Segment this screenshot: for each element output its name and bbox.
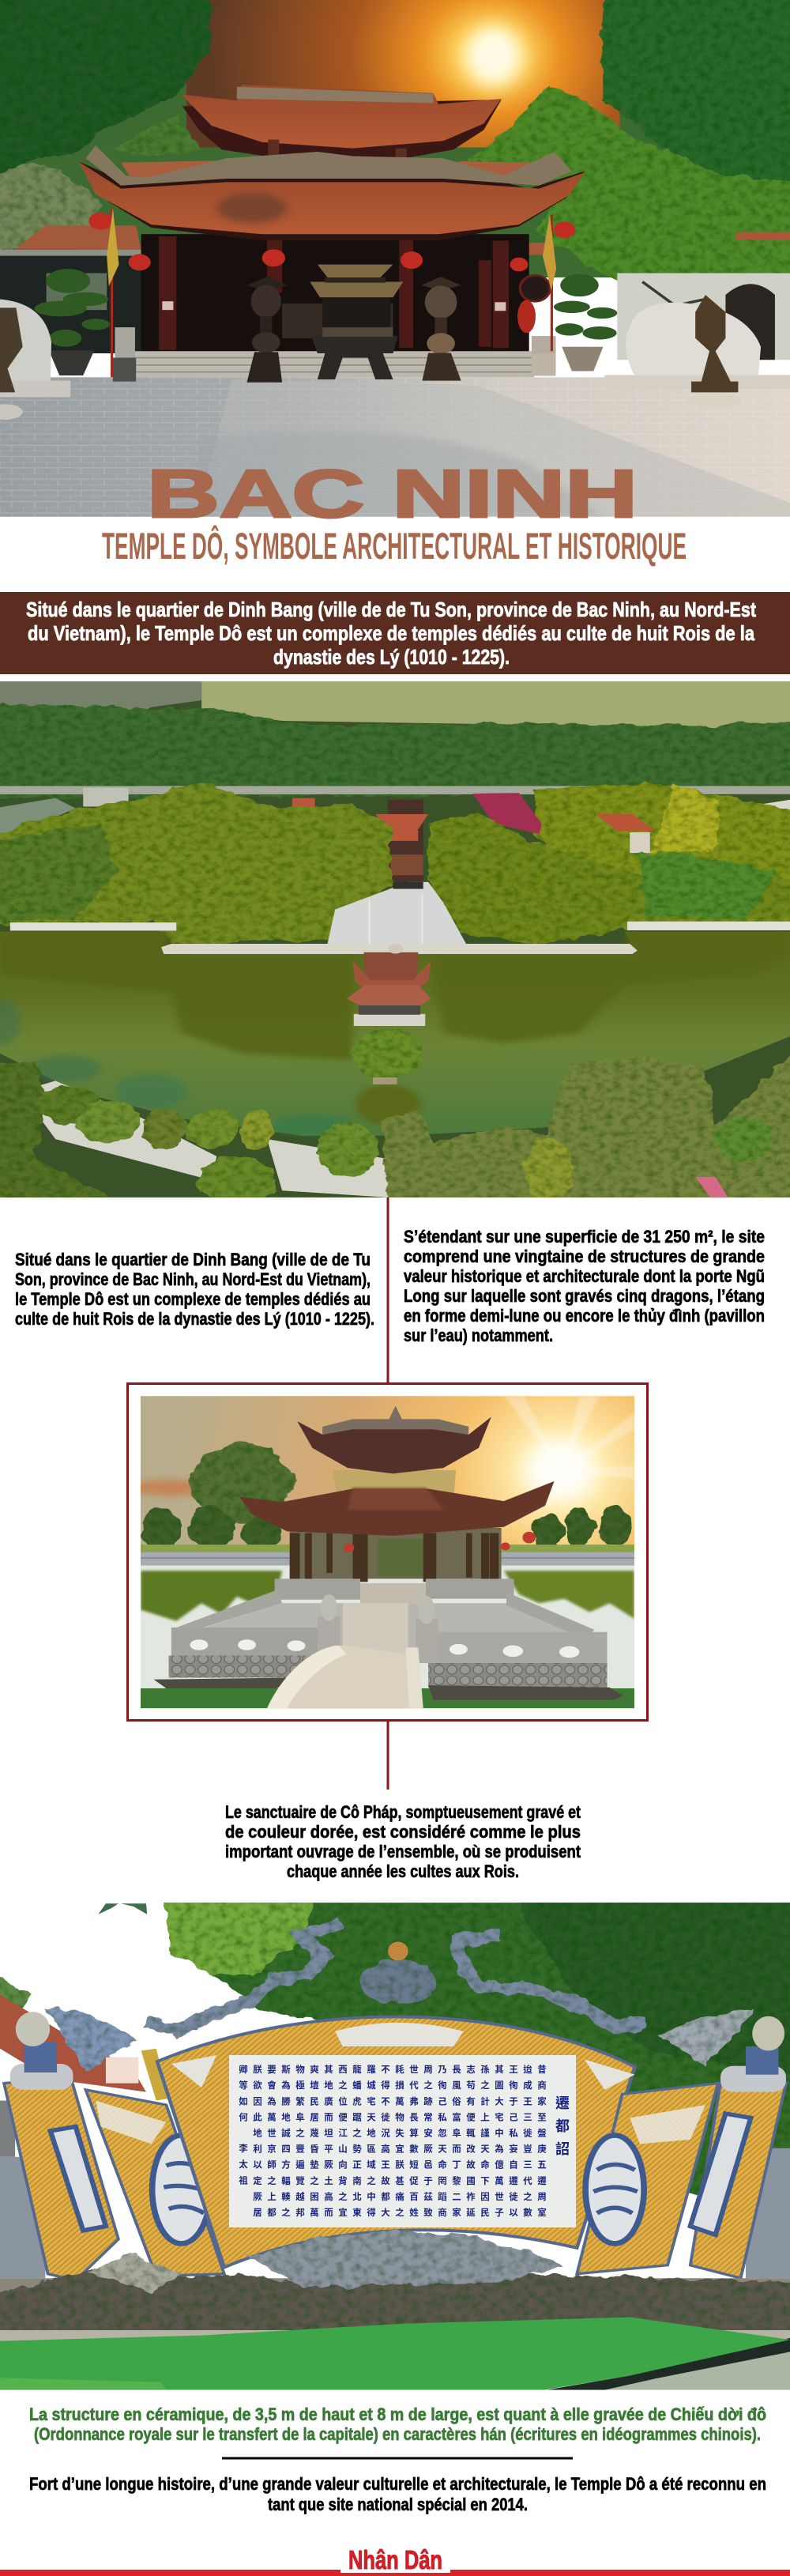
- white tablet with Chinese inscription: 耗損萬物失宜朕甚痛之: [393, 2064, 406, 2223]
- pond: [0, 932, 790, 1136]
- text block: location: Son, province de Bac Ninh, au Nord-Est du Vietnam),: [15, 1269, 371, 1289]
- white tablet with Chinese inscription: 孫之計上謹天命下因民: [479, 2064, 491, 2223]
- stone stairs: [134, 351, 534, 379]
- temple square: [328, 882, 466, 944]
- island tree: [352, 1029, 423, 1080]
- white tablet with Chinese inscription: [229, 2055, 576, 2227]
- right second scroll: [577, 2084, 718, 2274]
- text block: sanctuary: chaque année les cultes aux Rois.: [287, 1861, 519, 1881]
- connector line from frame to sanctuary text: [387, 1722, 389, 1790]
- foreground trees: [0, 1060, 151, 1218]
- walls: [10, 922, 176, 930]
- white tablet with Chinese inscription: 其圖大宅中為億萬世子: [493, 2064, 506, 2223]
- photo: aerial view of the temple and pond: [0, 681, 790, 1218]
- text block: sanctuary: [225, 1802, 581, 1881]
- white tablet with Chinese inscription: 物極繁阜之豐遍覽越邦: [294, 2064, 307, 2223]
- bonsai: [34, 269, 617, 347]
- text block: sanctuary: important ouvrage de l’ensemble, où se produisent: [225, 1842, 581, 1861]
- upper roof underside: [182, 100, 502, 160]
- white tablet with Chinese inscription: 昔商家至盤庚五遷周室: [536, 2065, 548, 2223]
- white tablet with Chinese inscription: 王徇于己私妄自遷徙以: [507, 2065, 520, 2223]
- foreground: bank and walkway: [0, 1054, 388, 1197]
- bronze urns and burners: [247, 277, 288, 383]
- artificial grass: [595, 2348, 790, 2390]
- white tablet with Chinese inscription: 要會為萬世京師之上都: [265, 2065, 278, 2223]
- panel: intro band: dynastie des Lý (1010 - 1225).: [273, 645, 510, 669]
- pavilion: [290, 1528, 502, 1578]
- elephants: [0, 299, 51, 382]
- text block: location: [15, 1250, 374, 1329]
- white tablet with Chinese inscription: 其地廣而坦平厥土高而: [322, 2064, 335, 2223]
- white tablet with Chinese inscription: 卿等如何: [237, 2065, 250, 2128]
- white tablet with Chinese inscription: 世代弗長算數短促百姓: [408, 2064, 420, 2223]
- white tablet with Chinese inscription: 不得不徙況高王故都大: [379, 2065, 392, 2223]
- white tablet with Chinese inscription: 長風俗富阜而丁黎二家: [450, 2065, 463, 2223]
- courtyard pavement: [0, 377, 790, 520]
- text block: sanctuary: Le sanctuaire de Cô Pháp, somptueusement gravé et: [225, 1802, 581, 1822]
- white tablet with Chinese inscription: 李太祖: [237, 2143, 250, 2191]
- text block: location: Situé dans le quartier de Dinh Bang (ville de de Tu: [15, 1250, 371, 1269]
- right scroll roll: [690, 2084, 786, 2278]
- white tablet with Chinese inscription: 志苟有便輒改故國祚延: [465, 2064, 477, 2223]
- left scroll roll: [4, 2076, 118, 2280]
- dragons: [146, 1923, 343, 2031]
- white tablet with Chinese inscription: 爽塏民居蔑昏墊之困萬: [308, 2065, 321, 2223]
- tree masses: [0, 783, 393, 944]
- left second scroll: [85, 2090, 224, 2276]
- panel: framed water pavilion photo: [126, 1383, 648, 1720]
- white tablet with Chinese inscription: 朕欲因此地利以定厥居: [251, 2064, 264, 2223]
- text block: site area: sur l’eau) notamment.: [404, 1326, 553, 1345]
- photo: water pavilion at sunset: [126, 1396, 634, 1708]
- photo: ceramic structure: [0, 1880, 790, 2390]
- lanterns: [88, 213, 575, 271]
- white tablet with Chinese inscription: 西之位便江山向背之宜: [337, 2065, 349, 2223]
- connector line from aerial photo to frame: [387, 1197, 389, 1382]
- text block: location: culte de huit Rois de la dynastie des Lý (1010 - 1225).: [15, 1309, 374, 1329]
- white tablet with Chinese inscription: 龍蟠虎踞之勢正南北東: [351, 2064, 363, 2223]
- platform: [176, 1603, 600, 1647]
- footer bar: [0, 2570, 790, 2576]
- white tablet with Chinese inscription: 迨成王三徙豈三代之數: [521, 2064, 534, 2223]
- water pavilion: [354, 1014, 425, 1026]
- text block: site area: [404, 1227, 765, 1345]
- central banner: [157, 2016, 635, 2268]
- white tablet with Chinese inscription: 周之跡常安厥邑于茲致: [422, 2065, 434, 2223]
- ground and rocks: [0, 2278, 790, 2300]
- white tablet with Chinese inscription: 乃徇己私忽天命罔蹈商: [436, 2065, 449, 2223]
- text block: sanctuary: de couleur dorée, est considéré comme le plus: [225, 1822, 581, 1842]
- lower roof ridge: [268, 139, 280, 155]
- photo: temple courtyard at sunset: [0, 0, 790, 520]
- panel: intro band: [0, 592, 790, 674]
- side ornaments: [0, 2157, 45, 2278]
- white tablet with Chinese inscription: 遷都詔: [552, 2095, 573, 2164]
- text block: national site recognition: [29, 2474, 766, 2514]
- text block: ceramic structure: [29, 2404, 766, 2444]
- white tablet with Chinese inscription: 羅城宅天地區域之中得: [365, 2065, 378, 2223]
- flags: [110, 208, 114, 377]
- text block: location: le Temple Dô est un complexe de temples dédiés au: [15, 1289, 371, 1309]
- title: BAC NINH: [147, 457, 638, 532]
- white tablet with Chinese inscription: 斯為勝地誠四方輻輳之: [280, 2064, 292, 2223]
- logo: Nhan Dan: Nhân Dân: [348, 2545, 442, 2574]
- temple buildings: [388, 800, 423, 882]
- text block: national site recognition: tant que site national spécial en 2014.: [268, 2495, 528, 2514]
